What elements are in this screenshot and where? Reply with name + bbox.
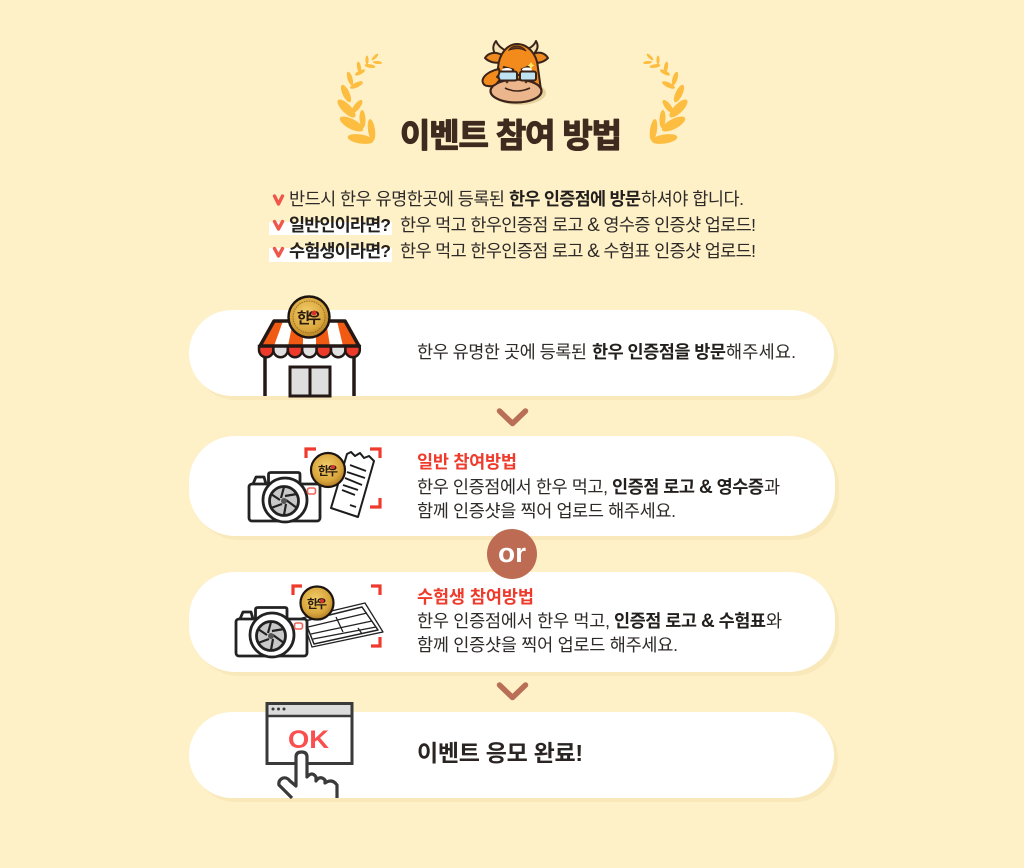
step 3 text: 함께 인증샷을 찍어 업로드 해주세요.: [417, 635, 678, 655]
note line two: 한우 먹고 한우인증점 로고 & 영수증 인증샷 업로드!: [400, 215, 756, 236]
note line three: 한우 먹고 한우인증점 로고 & 수험표 인증샷 업로드!: [400, 241, 756, 262]
step 1 text: 한우 인증점을 방문: [592, 342, 726, 362]
icon: red check three: [274, 248, 282, 256]
icon: red frame corners: [306, 449, 380, 507]
icon: camera: [236, 608, 307, 657]
step 1 text: 한우 유명한 곳에 등록된: [417, 342, 587, 362]
arrow: down chevron two: [500, 685, 526, 698]
icon: camera: [249, 472, 320, 522]
note line one: 하셔야 합니다.: [641, 189, 744, 209]
badge: or: [487, 529, 537, 579]
title: 이벤트 참여 방법: [400, 117, 622, 154]
note line three: 수험생이라면?: [289, 241, 391, 261]
step 2 text: 과: [764, 477, 780, 497]
panel: step 2 general participation: [189, 436, 839, 540]
receipt lines: [342, 465, 366, 507]
step 1 text: [417, 342, 796, 362]
icon: certified badge: [300, 586, 334, 620]
icon: red check one: [274, 196, 282, 204]
icon: bull mascot with glasses: [483, 41, 548, 105]
icon: left laurel: [335, 53, 382, 145]
step 3 text: 한우 인증점에서 한우 먹고,: [417, 611, 610, 631]
step 2 text: 한우 인증점에서 한우 먹고,: [417, 477, 608, 497]
arrow: down chevron one: [500, 411, 526, 424]
step 4 text: 이벤트 응모 완료!: [417, 740, 583, 766]
panel: step 3 exam taker participation: [189, 572, 839, 676]
icon: certified badge: 한우: [307, 596, 327, 611]
step 3 text: 인증점 로고 & 수험표: [614, 611, 766, 632]
step 3 text: 수험생 참여방법: [417, 587, 534, 607]
icon: red frame corners: [293, 586, 380, 646]
panel: step 4 complete: [189, 704, 838, 802]
badge: or: or: [498, 538, 527, 568]
step 2 text: [417, 452, 780, 521]
icon: exam ticket: [302, 603, 383, 647]
step 1 text: 해주세요.: [726, 342, 796, 362]
icon: right laurel: [643, 53, 690, 145]
step 2 text: 함께 인증샷을 찍어 업로드 해주세요.: [417, 501, 676, 521]
icon: receipt: [331, 452, 374, 517]
step 2 text: 일반 참여방법: [417, 452, 517, 472]
step 2 text: 인증점 로고 & 영수증: [612, 477, 764, 498]
note line two: 일반인이라면?: [289, 215, 391, 235]
step 3 text: [417, 587, 782, 655]
highlight: exam taker: [269, 248, 392, 262]
icon: certified badge: 한우: [297, 310, 321, 327]
icon: store with badge: [259, 296, 360, 396]
step 3 text: 와: [766, 611, 782, 631]
icon: red check two: [274, 222, 282, 229]
panel: step 1 visit store: [189, 296, 838, 400]
note line one: [289, 189, 744, 209]
highlight: general participant: [269, 222, 392, 235]
text block: participation notes: [269, 189, 756, 262]
note line one: 반드시 한우 유명한곳에 등록된: [289, 189, 505, 209]
icon: certified badge: [311, 453, 345, 487]
note line one: 한우 인증점에 방문: [509, 189, 641, 209]
icon: OK window with pointing hand: [267, 704, 352, 798]
icon: certified badge: 한우: [318, 463, 338, 478]
icon: OK window with pointing hand: OK: [288, 726, 329, 754]
